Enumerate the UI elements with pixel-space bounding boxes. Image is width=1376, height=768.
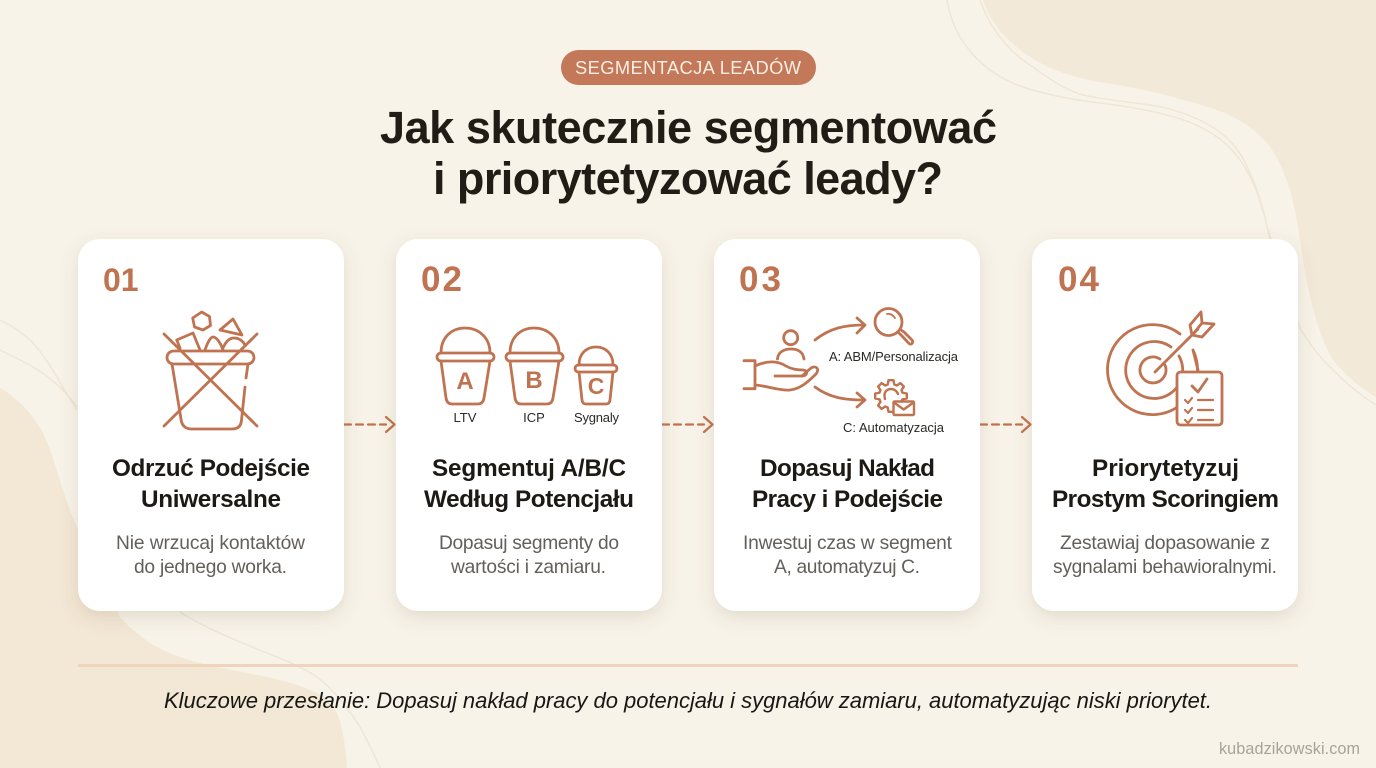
panel: step 3 [714,239,980,611]
panel: step 2: wartości i zamiaru. [450,557,606,578]
arrow: to segment C [815,387,865,407]
arrow: step 1 to 2 [344,417,394,432]
title [380,102,997,204]
panel: step 2: A [456,368,474,395]
panel: step 4: 04 [1058,260,1100,299]
badge: Segmentacja leadów [561,50,816,85]
panel: step 2: Segmentuj A/B/C [432,455,626,482]
watermark: kubadzikowski.com [1219,740,1360,758]
icon: crossed-out bucket [164,312,257,429]
divider [78,664,1298,667]
panel: step 1: 01 [103,262,139,298]
panel: step 4: sygnalami behawioralnymi. [1053,557,1277,578]
arrow: step 2 to 3 [662,417,712,432]
panel: step 3: C: Automatyzacja [843,420,945,435]
panel: step 2: Dopasuj segmenty do [439,533,619,554]
icon: bucket C [575,347,617,404]
panel: step 1: Uniwersalne [141,486,281,513]
panel: step 3: Dopasuj Nakład [760,455,935,482]
arrow: step 3 to 4 [980,417,1030,432]
panel: step 1: Odrzuć Podejście [112,455,310,482]
panel: step 1 [78,239,344,611]
title: i priorytetyzować leady? [433,153,943,204]
panel: step 4: Prostym Scoringiem [1052,486,1279,513]
panel: step 1: Nie wrzucaj kontaktów [116,533,305,554]
panel: step 2: ICP [523,410,545,425]
arrow: to segment A [815,318,865,340]
icon: target with arrow and checklist [1108,312,1222,425]
panel: step 2: 02 [421,260,462,299]
panel: step 2: Sygnaly [574,410,620,425]
panel: step 2: B [525,367,543,394]
panel: step 4 [1032,239,1298,611]
icon: bucket B [506,328,563,404]
panel: step 3: A, automatyzuj C. [774,557,920,578]
key message: Kluczowe przesłanie: Dopasuj nakład pracy do potencjału i sygnałów zamiaru, automatyzując niski priorytet. [164,688,1212,713]
panel: step 3: Pracy i Podejście [752,486,943,513]
title: Jak skutecznie segmentować [380,102,997,153]
badge: Segmentacja leadów: SEGMENTACJA LEADÓW [575,57,802,78]
panel: step 3: A: ABM/Personalizacja [829,349,959,364]
icon: magnifier [875,308,913,344]
panel: step 2: C [588,373,604,399]
panel: step 4: Priorytetyzuj [1092,455,1239,482]
panel: step 1: do jednego worka. [134,557,287,578]
panel: step 2: LTV [454,410,477,425]
icon: bucket A [437,328,494,404]
panel: step 3: 03 [739,260,781,299]
panel: step 4: Zestawiaj dopasowanie z [1060,533,1270,554]
icon: hand with person [744,331,818,390]
icon: gear with envelope [875,380,914,415]
panel: step 2: Według Potencjału [424,486,634,513]
panel: step 3: Inwestuj czas w segment [743,533,953,554]
panel: step 2 [396,239,662,611]
